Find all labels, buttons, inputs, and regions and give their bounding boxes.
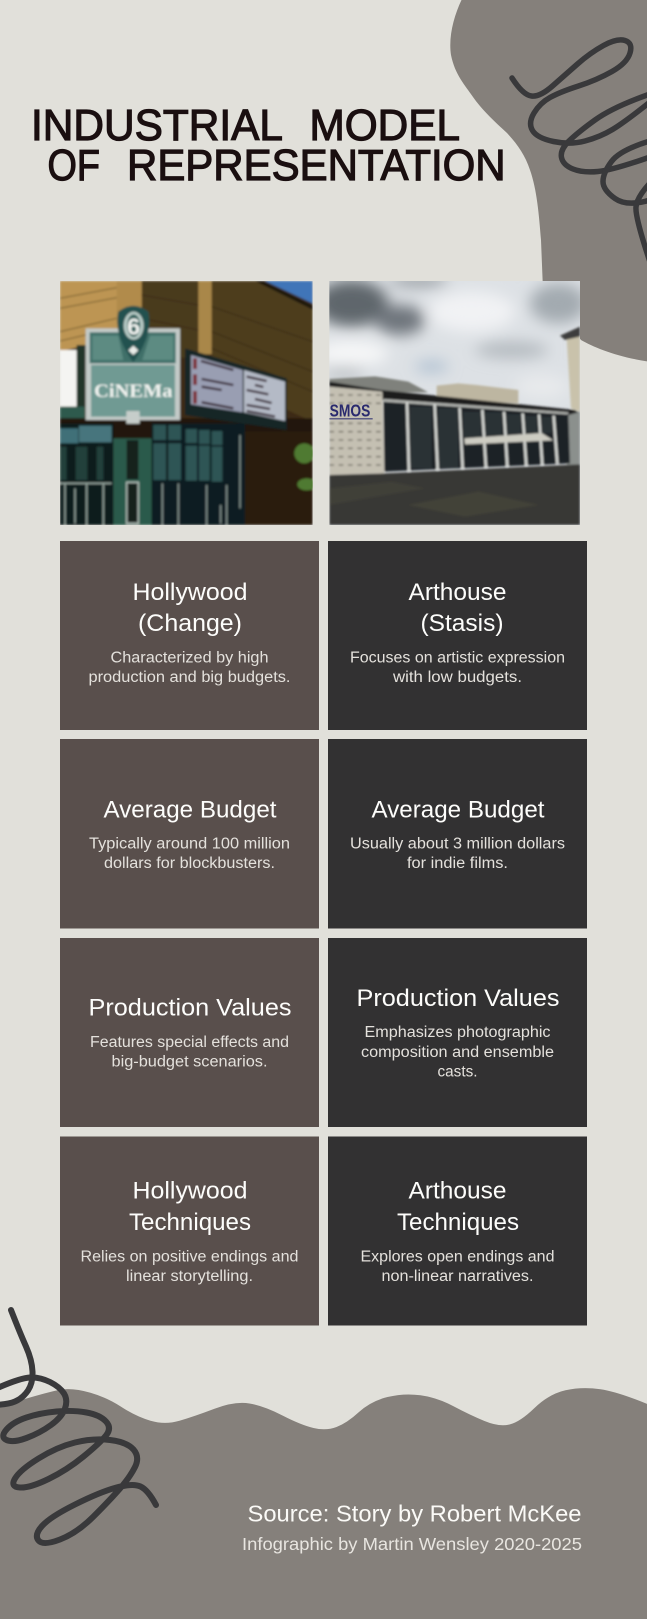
card body: Characterized by high xyxy=(110,650,268,666)
card heading: Production Values xyxy=(88,994,292,1022)
card body: dollars for blockbusters. xyxy=(104,855,275,872)
card heading: (Stasis) xyxy=(420,610,504,637)
infographic credit: Infographic by Martin Wensley 2020-2025 xyxy=(242,1534,582,1554)
photo: cinema exterior: 6 xyxy=(127,313,140,339)
card heading: (Change) xyxy=(138,610,242,637)
card body xyxy=(360,1248,554,1285)
card body: Features special effects and xyxy=(90,1034,289,1051)
title: OF xyxy=(48,141,100,190)
card body: linear storytelling. xyxy=(126,1268,253,1285)
card body: Relies on positive endings and xyxy=(80,1248,298,1266)
squiggle: top right xyxy=(512,40,647,262)
card heading xyxy=(397,1178,519,1236)
card heading xyxy=(129,1178,251,1236)
card body: Focuses on artistic expression xyxy=(350,650,565,666)
photo: arthouse cinema building xyxy=(315,276,587,525)
card heading: Techniques xyxy=(129,1209,251,1236)
decorative blob: top right xyxy=(450,0,647,362)
card: Hollywood (Change) xyxy=(60,541,319,730)
squiggle: bottom left xyxy=(0,1310,156,1543)
card body: composition and ensemble xyxy=(361,1044,554,1061)
card body: casts. xyxy=(438,1064,478,1080)
photo: arthouse cinema building: SMOS xyxy=(330,401,370,421)
card: Arthouse production values xyxy=(328,938,587,1127)
card heading xyxy=(408,579,506,637)
card body: with low budgets. xyxy=(392,669,522,686)
card: Arthouse average budget xyxy=(328,739,587,928)
title: REPRESENTATION xyxy=(127,141,506,190)
card: Hollywood average budget xyxy=(60,739,319,928)
card heading: Arthouse xyxy=(408,579,506,606)
card: Hollywood production values xyxy=(60,938,319,1127)
card body xyxy=(80,1248,298,1285)
card body xyxy=(90,1034,289,1070)
title xyxy=(31,101,506,190)
card heading: Hollywood xyxy=(132,579,248,606)
photo: cinema exterior: CiNEMa xyxy=(94,381,173,402)
card: Hollywood techniques xyxy=(60,1136,319,1326)
title: INDUSTRIAL xyxy=(31,101,283,150)
card heading xyxy=(132,579,248,637)
card body: Usually about 3 million dollars xyxy=(350,836,565,852)
card body: Typically around 100 million xyxy=(89,836,290,852)
card body: Explores open endings and xyxy=(360,1248,554,1266)
title: MODEL xyxy=(310,101,460,150)
decorative wave: bottom xyxy=(0,1388,647,1619)
card heading: Production Values xyxy=(356,985,560,1012)
card body xyxy=(361,1024,554,1080)
card body: non-linear narratives. xyxy=(382,1268,534,1285)
card: Arthouse techniques xyxy=(328,1136,587,1326)
card body xyxy=(350,650,565,686)
photo: cinema exterior xyxy=(60,281,316,525)
card heading: Hollywood xyxy=(132,1178,248,1204)
card heading: Average Budget xyxy=(372,796,545,824)
card heading: Arthouse xyxy=(408,1178,506,1204)
card heading: Techniques xyxy=(397,1209,519,1236)
card body: for indie films. xyxy=(407,855,508,872)
card heading: Average Budget xyxy=(104,796,277,824)
card body xyxy=(88,650,290,686)
card body: big-budget scenarios. xyxy=(112,1054,268,1070)
source credit: Source: Story by Robert McKee xyxy=(248,1500,582,1526)
card: Arthouse (Stasis) xyxy=(328,541,587,730)
card body: Emphasizes photographic xyxy=(364,1024,551,1041)
card body xyxy=(350,836,565,872)
card body xyxy=(89,836,290,872)
card body: production and big budgets. xyxy=(88,669,290,686)
